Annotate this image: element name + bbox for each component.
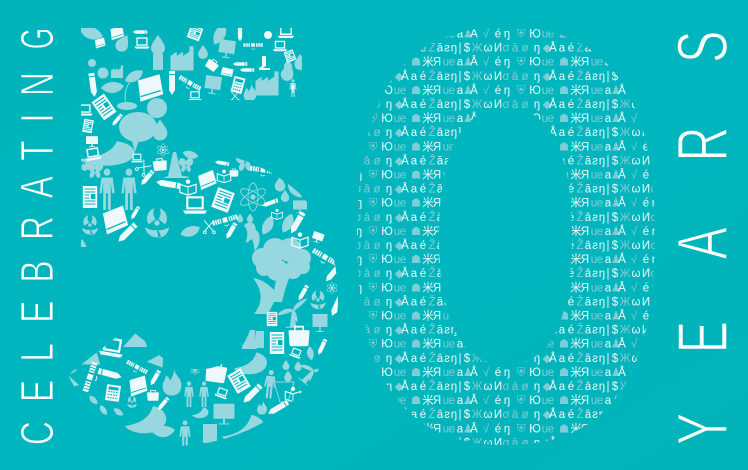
numeral 0 built from characters: Иσāø ŋ◆ÅaéŽāƨŋ|$ЖωИσāø ŋ◆ÅaéŽāƨŋ|$ЖωИσ bbox=[346, 239, 658, 252]
numeral 0 built from characters: éŋ ⛨ Юue☗米Яuea♟Å √ éŋ ⛨ Юue☗米Яuea♟Å √ éŋ bbox=[347, 168, 658, 182]
numeral 0 built from characters: Иσāø ŋ◆ÅaéŽāƨŋ|$ЖωИσāø ŋ◆ÅaéŽāƨŋ|$ЖωИσ bbox=[346, 126, 658, 139]
numeral 0 built from characters: éŋ ⛨ Юue☗米Яuea♟Å √ éŋ ⛨ Юue☗米Яuea♟Å √ éŋ bbox=[347, 112, 658, 125]
numeral 0 built from characters: éŋ ⛨ Юue☗米Яuea♟Å √ éŋ ⛨ Юue☗米Яuea♟Å √ éŋ bbox=[347, 197, 658, 210]
numeral 5 built from icons bbox=[60, 20, 350, 450]
numeral 0 built from characters: Иσāø ŋ◆ÅaéŽāƨŋ|$ЖωИσāø ŋ◆ÅaéŽāƨŋ|$ЖωИσ bbox=[346, 408, 658, 421]
numeral 0 built from characters: Иσāø ŋ◆ÅaéŽāƨŋ|$ЖωИσāø ŋ◆ÅaéŽāƨŋ|$ЖωИσ bbox=[346, 267, 658, 280]
pale icons: stem and bowl top bbox=[78, 148, 307, 251]
icon: large tree bbox=[252, 238, 311, 302]
numeral 0 built from characters: éŋ ⛨ Юue☗米Яuea♟Å √ éŋ ⛨ Юue☗米Яuea♟Å √ éŋ bbox=[347, 56, 658, 69]
numeral 0 built from characters: éŋ ⛨ Юue☗米Яuea♟Å √ éŋ ⛨ Юue☗米Яuea♟Å √ éŋ bbox=[347, 225, 658, 238]
numeral 0 built from characters: Иσāø ŋ◆ÅaéŽāƨŋ|$ЖωИσāø ŋ◆ÅaéŽāƨŋ|$ЖωИσ bbox=[346, 98, 658, 111]
numeral 0 built from characters bbox=[346, 28, 658, 449]
label: CELEBRATING: G bbox=[13, 28, 64, 49]
numeral 0 built from characters: Иσāø ŋ◆ÅaéŽāƨŋ|$ЖωИσāø ŋ◆ÅaéŽāƨŋ|$ЖωИσ bbox=[346, 42, 658, 55]
numeral 0 built from characters: Иσāø ŋ◆ÅaéŽāƨŋ|$ЖωИσāø ŋ◆ÅaéŽāƨŋ|$ЖωИσ bbox=[346, 211, 658, 224]
numeral 0 built from characters: éŋ ⛨ Юue☗米Яuea♟Å √ éŋ ⛨ Юue☗米Яuea♟Å √ éŋ bbox=[347, 394, 658, 407]
numeral 0 built from characters: éŋ ⛨ Юue☗米Яuea♟Å √ éŋ ⛨ Юue☗米Яuea♟Å √ éŋ bbox=[347, 281, 658, 294]
label: CELEBRATING: CELEBRATIN bbox=[13, 72, 63, 445]
numeral 0 built from characters: Иσāø ŋ◆ÅaéŽāƨŋ|$ЖωИσāø ŋ◆ÅaéŽāƨŋ|$ЖωИσ bbox=[346, 183, 658, 196]
icon: big swoosh bbox=[79, 141, 135, 171]
numeral 0 built from characters: Иσāø ŋ◆ÅaéŽāƨŋ|$ЖωИσāø ŋ◆ÅaéŽāƨŋ|$ЖωИσ bbox=[346, 380, 658, 393]
numeral 0 built from characters: éŋ ⛨ Юue☗米Яuea♟Å √ éŋ ⛨ Юue☗米Яuea♟Å √ éŋ bbox=[347, 140, 658, 153]
numeral 0 built from characters: Иσāø ŋ◆ÅaéŽāƨŋ|$ЖωИσāø ŋ◆ÅaéŽāƨŋ|$ЖωИσ bbox=[346, 436, 658, 449]
numeral 0 built from characters: Иσāø ŋ◆ÅaéŽāƨŋ|$ЖωИσāø ŋ◆ÅaéŽāƨŋ|$ЖωИσ bbox=[346, 352, 658, 365]
pale icons: bowl right and lower bbox=[67, 228, 329, 448]
pale icons: upper bar bbox=[77, 22, 306, 140]
numeral 0 built from characters: éŋ ⛨ Юue☗米Яuea♟Å √ éŋ ⛨ Юue☗米Яuea♟Å √ éŋ bbox=[347, 366, 658, 379]
numeral 0 built from characters: Иσāø ŋ◆ÅaéŽāƨŋ|$ЖωИσāø ŋ◆ÅaéŽāƨŋ|$ЖωИσ bbox=[346, 154, 658, 167]
numeral 0 built from characters: Иσāø ŋ◆ÅaéŽāƨŋ|$ЖωИσāø ŋ◆ÅaéŽāƨŋ|$ЖωИσ bbox=[346, 295, 658, 308]
numeral 0 built from characters: Иσāø ŋ◆ÅaéŽāƨŋ|$ЖωИσāø ŋ◆ÅaéŽāƨŋ|$ЖωИσ bbox=[346, 324, 658, 337]
icon: thought tree crown bbox=[119, 112, 157, 152]
numeral 0 built from characters: éŋ ⛨ Юue☗米Яuea♟Å √ éŋ ⛨ Юue☗米Яuea♟Å √ éŋ bbox=[347, 253, 658, 266]
numeral 0 built from characters: éŋ ⛨ Юue☗米Яuea♟Å √ éŋ ⛨ Юue☗米Яuea♟Å √ éŋ bbox=[347, 338, 658, 351]
numeral 0 built from characters: éŋ ⛨ Юue☗米Яuea♟Å √ éŋ ⛨ Юue☗米Яuea♟Å √ éŋ bbox=[347, 84, 658, 97]
white icons: upper bar bbox=[77, 25, 325, 248]
numeral 0 built from characters: éŋ ⛨ Юue☗米Яuea♟Å √ éŋ ⛨ Юue☗米Яuea♟Å √ éŋ bbox=[347, 28, 658, 40]
label: YEARS: YEARS bbox=[663, 31, 742, 445]
white icons: lower bowl bbox=[83, 248, 345, 416]
numeral 0 built from characters: éŋ ⛨ Юue☗米Яuea♟Å √ éŋ ⛨ Юue☗米Яuea♟Å √ éŋ bbox=[347, 422, 658, 435]
numeral 0 built from characters: éŋ ⛨ Юue☗米Яuea♟Å √ éŋ ⛨ Юue☗米Яuea♟Å √ éŋ bbox=[347, 310, 658, 322]
numeral 0 built from characters: Иσāø ŋ◆ÅaéŽāƨŋ|$ЖωИσāø ŋ◆ÅaéŽāƨŋ|$ЖωИσ bbox=[346, 70, 658, 83]
